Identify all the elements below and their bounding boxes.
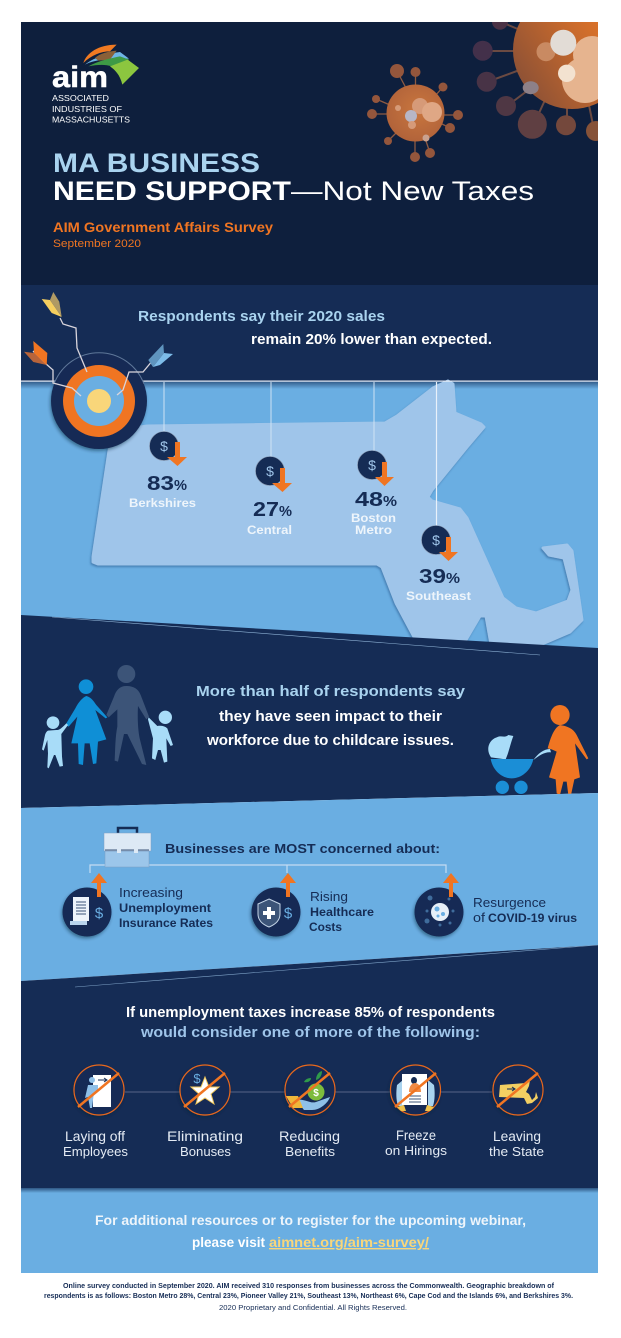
stat: Boston Metro — [351, 450, 397, 537]
option: laying off: Employees — [63, 1145, 128, 1159]
icon: woman with stroller — [488, 705, 588, 795]
option: benefits: Reducing — [279, 1129, 340, 1144]
stat: Berkshires — [129, 432, 196, 510]
panel: childcare — [21, 615, 598, 808]
footer note: respondents is as follows: Boston Metro 28%, Central 23%, Pioneer Valley 21%, Southeast 13%, Northeast 6%, Cape Cod and the Islands 6%, and Berkshires 3%. — [44, 1293, 573, 1300]
stat: Central: % — [279, 503, 292, 520]
connector line — [125, 1091, 492, 1093]
logo: AIM: INDUSTRIES OF — [52, 104, 122, 114]
title — [53, 148, 534, 206]
icon: target with arrows — [24, 292, 173, 449]
panel: header — [21, 22, 598, 285]
option: bonuses: $ — [193, 1071, 201, 1086]
stat: Southeast — [406, 526, 471, 603]
map of Massachusetts — [93, 381, 582, 650]
stat: Berkshires: 83 — [147, 473, 174, 495]
stat: Boston Metro: Metro — [355, 523, 392, 537]
option: benefits: Benefits — [285, 1145, 335, 1159]
stat: Central — [247, 456, 292, 537]
footer note — [44, 1283, 573, 1312]
title: NEED SUPPORT — [53, 176, 292, 206]
heading: concerns: Businesses are MOST concerned about: — [165, 842, 440, 856]
subtitle — [53, 219, 273, 250]
icon: briefcase — [104, 828, 151, 867]
panel: call to action: For additional resources or to register for the upcoming webinar, — [95, 1212, 526, 1228]
stat: Southeast: % — [446, 570, 460, 587]
stat: Berkshires: % — [174, 477, 187, 494]
footer note: 2020 Proprietary and Confidential. All Rights Reserved. — [219, 1305, 407, 1312]
text: childcare statement: they have seen impact to their — [219, 709, 442, 725]
option: hirings: Freeze — [396, 1128, 436, 1143]
panel: concerns — [21, 793, 598, 981]
panel: call to action — [21, 1188, 598, 1273]
subtitle: AIM Government Affairs Survey — [53, 219, 273, 235]
logo: AIM: MASSACHUSETTS — [52, 115, 130, 125]
concern: unemployment insurance: Increasing — [119, 885, 183, 900]
panel: call to action: aimnet.org/aim-survey/ — [269, 1234, 429, 1250]
option: benefits — [279, 1065, 340, 1159]
concern: healthcare: Healthcare — [310, 907, 374, 919]
concern: healthcare — [252, 873, 374, 936]
concern: healthcare: $ — [284, 905, 293, 922]
stat: Central: $ — [266, 463, 274, 479]
panel: call to action: please visit — [192, 1234, 265, 1250]
stat: Berkshires: $ — [160, 438, 168, 454]
subtitle: September 2020 — [53, 238, 141, 250]
concern: covid: of — [473, 910, 485, 925]
option: leaving state — [489, 1065, 544, 1159]
text: childcare statement — [196, 684, 465, 749]
stat: Berkshires: Berkshires — [129, 496, 196, 510]
title: —Not New Taxes — [291, 176, 534, 206]
stat: Boston Metro: Boston — [351, 511, 396, 525]
option: bonuses — [167, 1065, 243, 1159]
stat: Southeast: $ — [432, 532, 440, 548]
option: laying off — [63, 1065, 128, 1159]
icon: family — [42, 665, 173, 768]
connector lines — [90, 865, 446, 873]
logo: AIM: ASSOCIATED — [52, 93, 109, 103]
stat: Boston Metro: 48 — [355, 489, 383, 511]
panel: sales band and map — [21, 285, 598, 651]
text: sales statement: Respondents say their 2020 sales — [138, 309, 385, 325]
option: hirings — [385, 1065, 447, 1158]
stat: Boston Metro: $ — [368, 457, 376, 473]
option: leaving state: Leaving — [493, 1129, 541, 1144]
concern: unemployment insurance: $ — [95, 905, 104, 922]
region lines — [164, 382, 436, 527]
text: childcare statement: More than half of respondents say — [196, 684, 465, 700]
concern: unemployment insurance: Unemployment — [119, 903, 211, 915]
concern: unemployment insurance: Insurance Rates — [119, 918, 213, 930]
logo: AIM: aim — [52, 61, 108, 94]
concern: healthcare: Rising — [310, 889, 348, 904]
icon: small virus — [367, 64, 463, 162]
title: MA BUSINESS — [53, 148, 260, 178]
text: sales statement: remain 20% lower than expected. — [251, 332, 492, 348]
concern: covid: Resurgence — [473, 895, 546, 910]
panel: unemployment taxes — [21, 945, 598, 1188]
text: taxes statement — [126, 1005, 495, 1041]
stat: Southeast: Southeast — [406, 589, 471, 603]
logo: AIM — [52, 45, 139, 125]
text: childcare statement: workforce due to childcare issues. — [206, 733, 454, 749]
icon: large virus — [472, 22, 598, 141]
concern: covid: COVID-19 virus — [488, 913, 577, 925]
concern: unemployment insurance — [62, 873, 213, 936]
text: taxes statement: If unemployment taxes increase 85% of respondents — [126, 1005, 495, 1021]
stat: Southeast: 39 — [419, 566, 446, 588]
concern: covid — [414, 873, 577, 936]
stat: Central: Central — [247, 523, 292, 537]
option: leaving state: the State — [489, 1145, 544, 1159]
text: taxes statement: would consider one of more of the following: — [140, 1025, 480, 1041]
option: benefits: $ — [313, 1088, 319, 1099]
option: bonuses: Bonuses — [180, 1145, 231, 1159]
option: bonuses: Eliminating — [167, 1129, 243, 1144]
option: laying off: Laying off — [65, 1129, 125, 1144]
concern: healthcare: Costs — [309, 922, 342, 934]
stat: Central: 27 — [253, 499, 279, 521]
text: sales statement — [138, 309, 492, 348]
stat: Boston Metro: % — [383, 493, 397, 510]
option: hirings: on Hirings — [385, 1144, 447, 1158]
footer note: Online survey conducted in September 2020. AIM received 310 responses from businesses across the Commonwealth. Geographic breakdown of — [63, 1283, 555, 1290]
